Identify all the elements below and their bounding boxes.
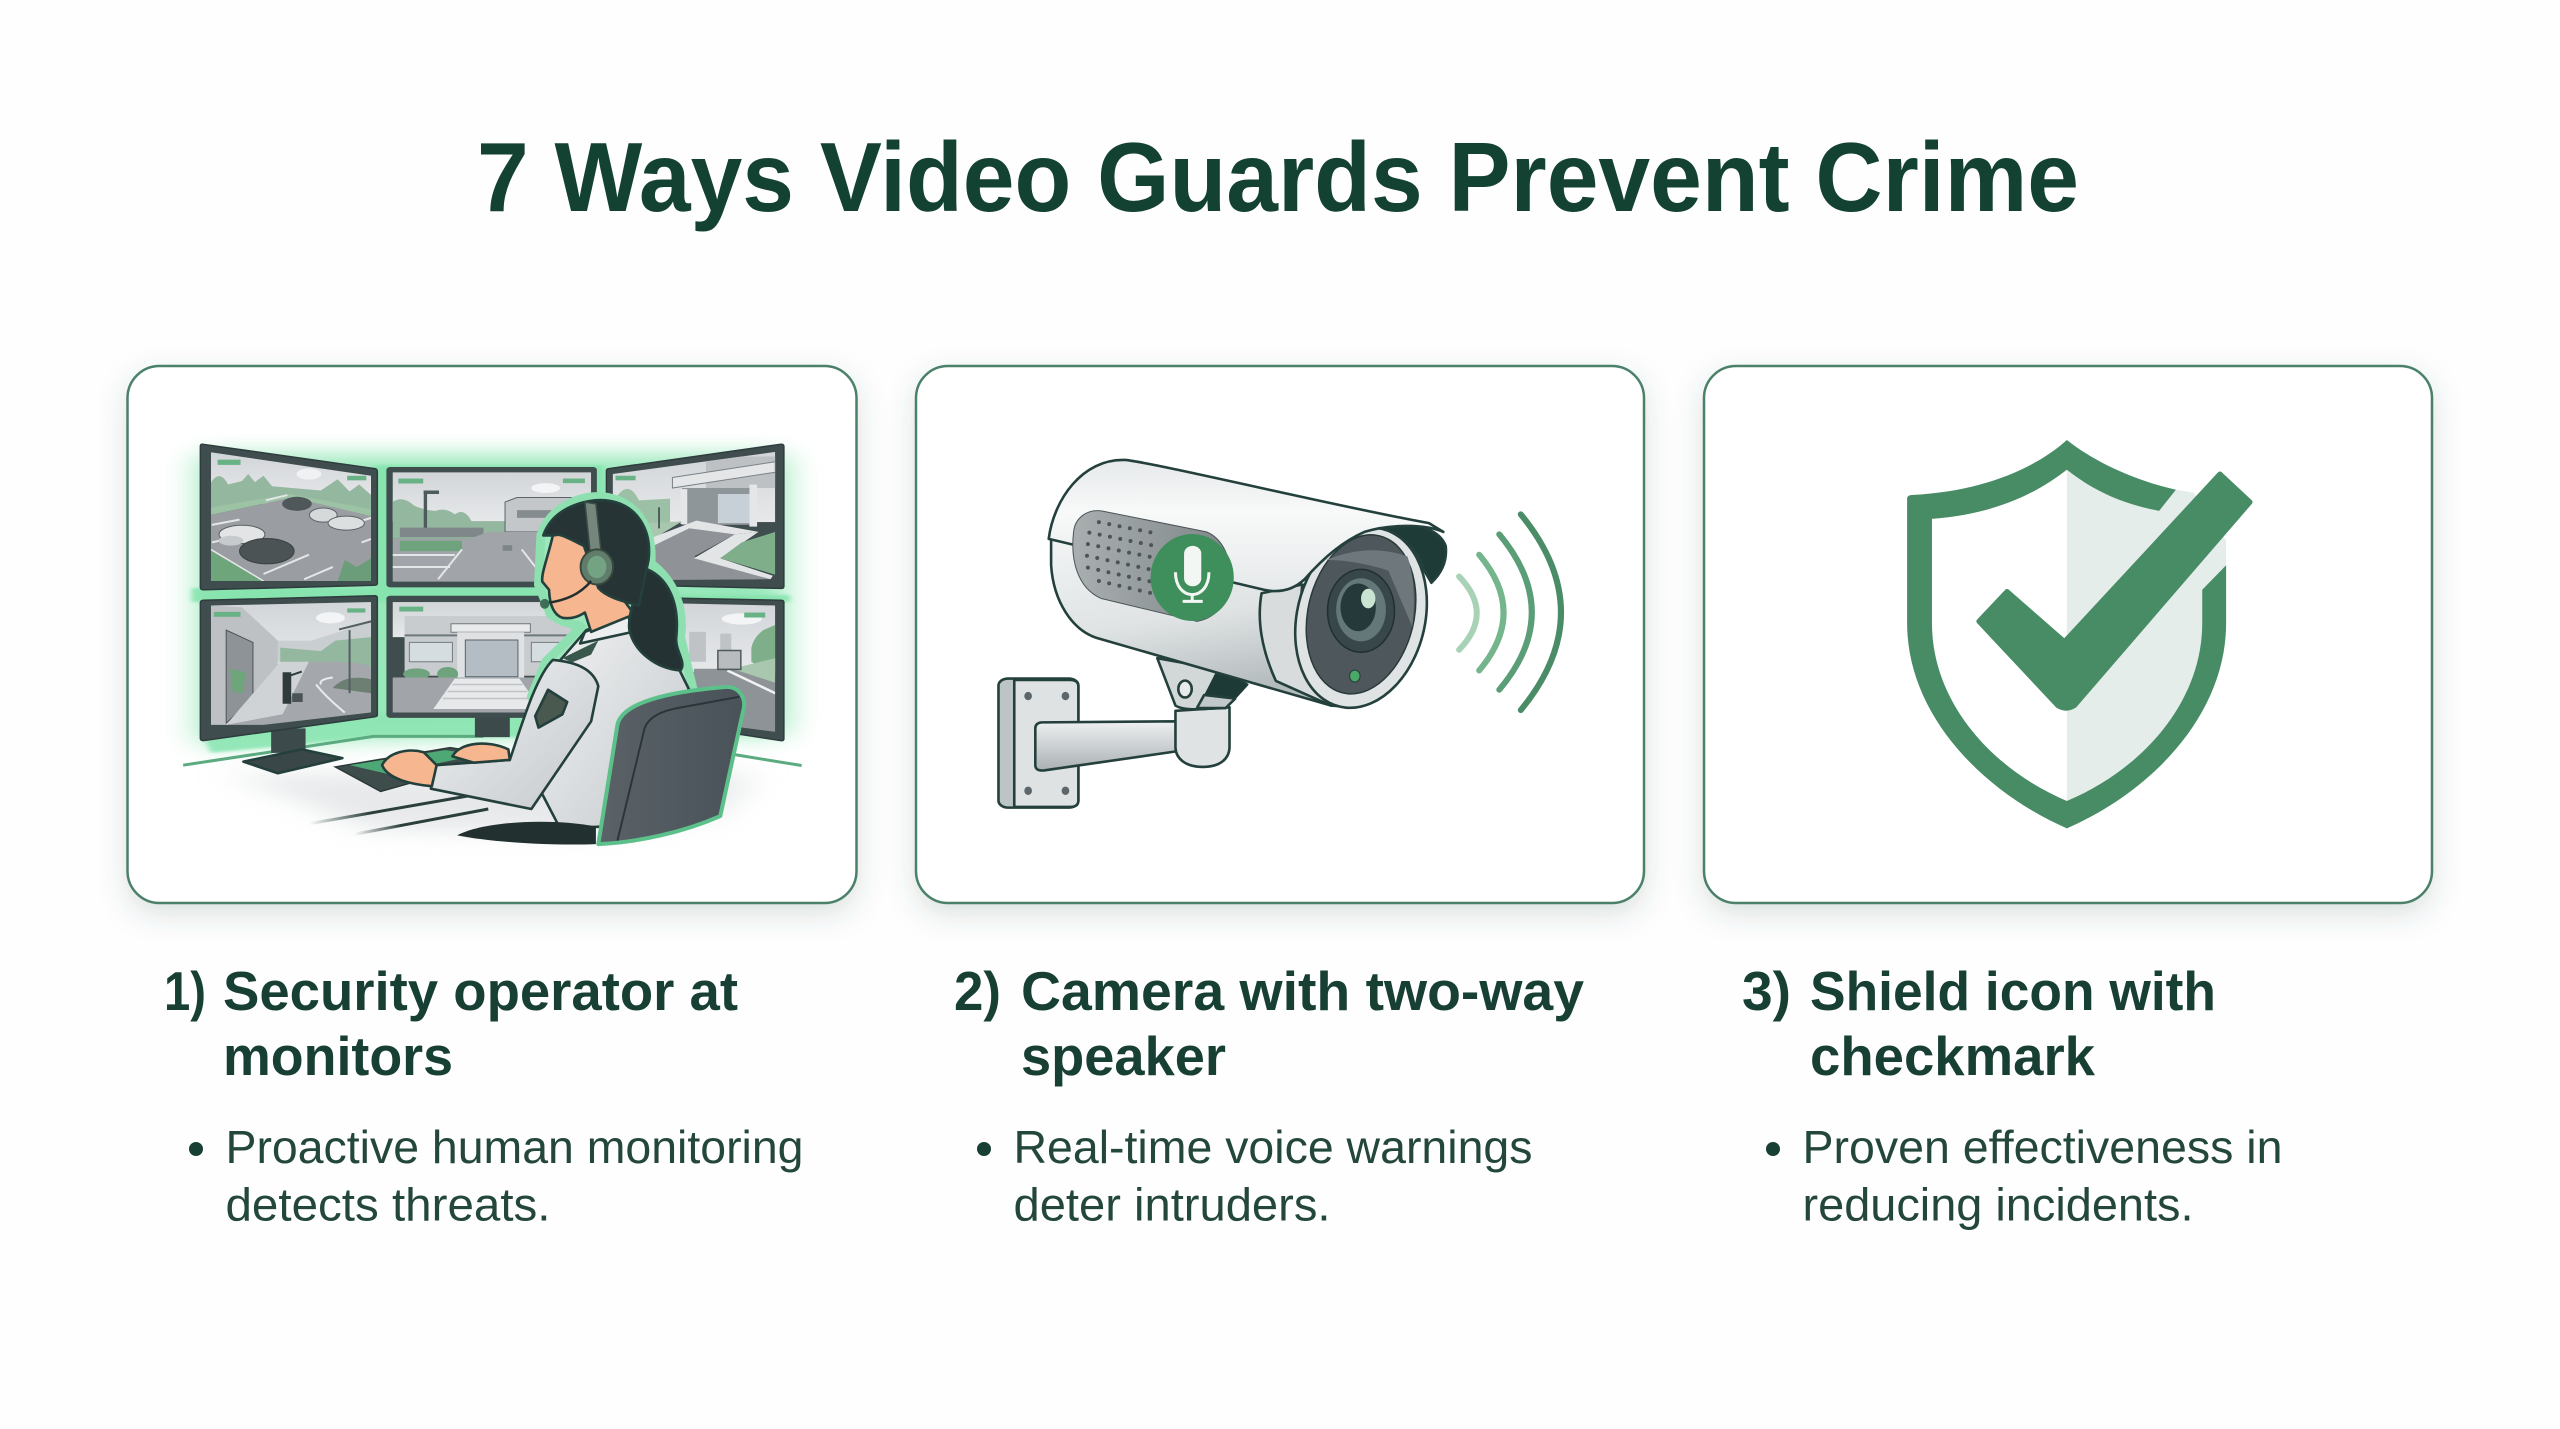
headset bbox=[540, 502, 613, 609]
monitor 1: parking lot bbox=[200, 444, 377, 590]
monitor 5: building front bbox=[386, 596, 572, 718]
speaker grille bbox=[1073, 511, 1231, 621]
bullet text 2: deter intruders. bbox=[1014, 1178, 1330, 1230]
illustration: operator at monitor wall bbox=[183, 444, 802, 845]
heading 2: 2) bbox=[954, 960, 1001, 1022]
hands bbox=[382, 751, 437, 786]
wall bracket bbox=[998, 679, 1078, 808]
panel: camera with speaker bbox=[916, 366, 1644, 1230]
desk edge lines bbox=[183, 736, 802, 766]
chair back bbox=[598, 687, 744, 844]
heading 1: Security operator at bbox=[223, 960, 738, 1022]
monitor 4: alley with figure bbox=[200, 596, 377, 741]
heading 2: speaker bbox=[1021, 1025, 1226, 1087]
keyboard bbox=[335, 748, 507, 791]
camera arm bbox=[1035, 721, 1178, 771]
bullet text 1: Proactive human monitoring bbox=[226, 1121, 803, 1173]
hair bbox=[543, 500, 649, 606]
monitor 2: road and office bbox=[386, 467, 597, 587]
heading 1 bbox=[164, 960, 738, 1087]
bullet text 1: detects threats. bbox=[226, 1178, 550, 1230]
sound waves bbox=[1459, 514, 1561, 710]
camera hood bbox=[1049, 460, 1443, 591]
bullet text 2 bbox=[977, 1121, 1532, 1230]
heading 2: Camera with two-way bbox=[1021, 960, 1584, 1022]
desk surface shadow bbox=[225, 774, 756, 834]
title: 7 Ways Video Guards Prevent Crime bbox=[477, 122, 2079, 232]
bullet text 3 bbox=[1766, 1121, 2282, 1230]
card 1 frame bbox=[128, 366, 856, 903]
illustration: security camera bbox=[998, 460, 1561, 808]
icon: shield with checkmark bbox=[1907, 440, 2250, 828]
heading 3: checkmark bbox=[1810, 1025, 2095, 1087]
heading 3: Shield icon with bbox=[1810, 960, 2216, 1022]
bullet text 3: reducing incidents. bbox=[1802, 1178, 2194, 1230]
face and neck bbox=[542, 532, 634, 632]
chair inner seam bbox=[617, 697, 739, 841]
arm joint bbox=[1175, 707, 1230, 767]
card 3 frame bbox=[1704, 366, 2432, 903]
heading 3: 3) bbox=[1742, 960, 1791, 1022]
bullet text 1 bbox=[189, 1121, 803, 1230]
monitor stands bbox=[243, 714, 510, 773]
panel: shield bbox=[1704, 366, 2432, 1230]
camera body bbox=[1051, 539, 1355, 707]
camera mount bbox=[1157, 658, 1247, 709]
heading 1: monitors bbox=[223, 1025, 453, 1087]
ponytail bbox=[629, 567, 682, 670]
operator figure bbox=[382, 497, 744, 845]
shoulder epaulette and patch bbox=[562, 641, 598, 662]
heading 1: 1) bbox=[164, 960, 206, 1022]
shield shaded half bbox=[2067, 470, 2226, 801]
front collar bbox=[1260, 585, 1331, 706]
seated lap bbox=[457, 822, 596, 845]
desk front lines bbox=[309, 793, 488, 834]
icon: microphone badge bbox=[1151, 534, 1234, 621]
heading 3 bbox=[1742, 960, 2216, 1087]
bullet text 3: Proven effectiveness in bbox=[1802, 1121, 2282, 1173]
sleeve arm bbox=[431, 660, 598, 809]
lens housing bbox=[1282, 522, 1440, 713]
collar bbox=[580, 614, 633, 643]
monitor 3: building entrance bbox=[606, 444, 784, 588]
panel: security operator bbox=[128, 366, 856, 1230]
green outline halo bbox=[531, 497, 694, 711]
heading 2 bbox=[954, 960, 1584, 1087]
hood interior bbox=[1384, 524, 1446, 583]
shield outline bbox=[1907, 440, 2226, 828]
green glow behind monitors bbox=[192, 455, 790, 753]
monitor 6: street scene bbox=[681, 598, 785, 742]
card 2 frame bbox=[916, 366, 1644, 903]
bullet text 2: Real-time voice warnings bbox=[1014, 1121, 1532, 1173]
torso and shirt bbox=[541, 614, 689, 828]
checkmark bbox=[1979, 474, 2250, 708]
